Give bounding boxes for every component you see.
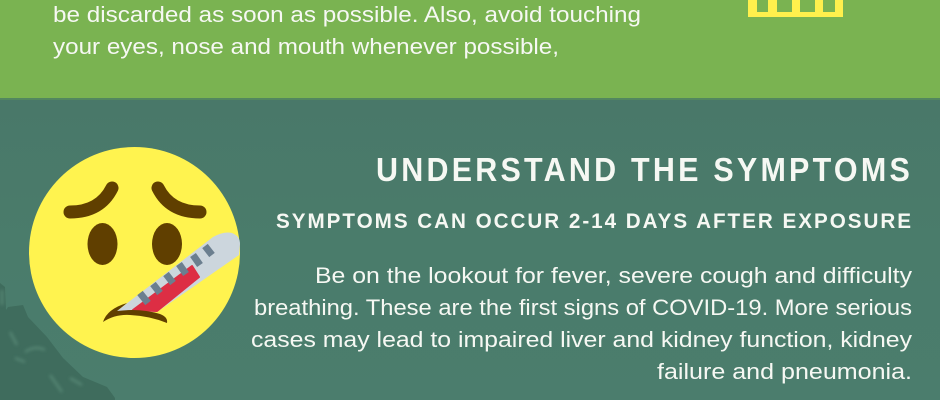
text: hygiene advice: your eyes, nose and mouth whenever possible, — [53, 34, 559, 59]
text: symptoms description — [251, 263, 912, 384]
panel: green hygiene section — [0, 0, 940, 98]
text: symptoms description: Be on the lookout for fever, severe cough and difficulty — [315, 263, 912, 288]
thermometer — [117, 232, 240, 312]
panel: teal symptoms section — [0, 98, 940, 400]
eyes — [88, 223, 182, 265]
text: symptoms description: cases may lead to impaired liver and kidney function, kidney — [251, 327, 912, 352]
text: symptoms description: breathing. These are the first signs of COVID-19. More serious — [254, 295, 912, 320]
mouth — [103, 303, 167, 323]
eyebrows — [70, 188, 200, 212]
icon: sick face with thermometer — [29, 147, 240, 358]
text: symptoms description: failure and pneumonia. — [657, 359, 912, 384]
text: hygiene advice: be discarded as soon as possible. Also, avoid touching — [53, 2, 641, 27]
illustration: mountain silhouette — [0, 283, 115, 400]
face — [29, 147, 240, 358]
subheading: SYMPTOMS CAN OCCUR 2-14 DAYS AFTER EXPOSURE — [276, 210, 913, 233]
text: hygiene advice — [53, 2, 641, 59]
icon: yellow bin base — [748, 0, 843, 17]
